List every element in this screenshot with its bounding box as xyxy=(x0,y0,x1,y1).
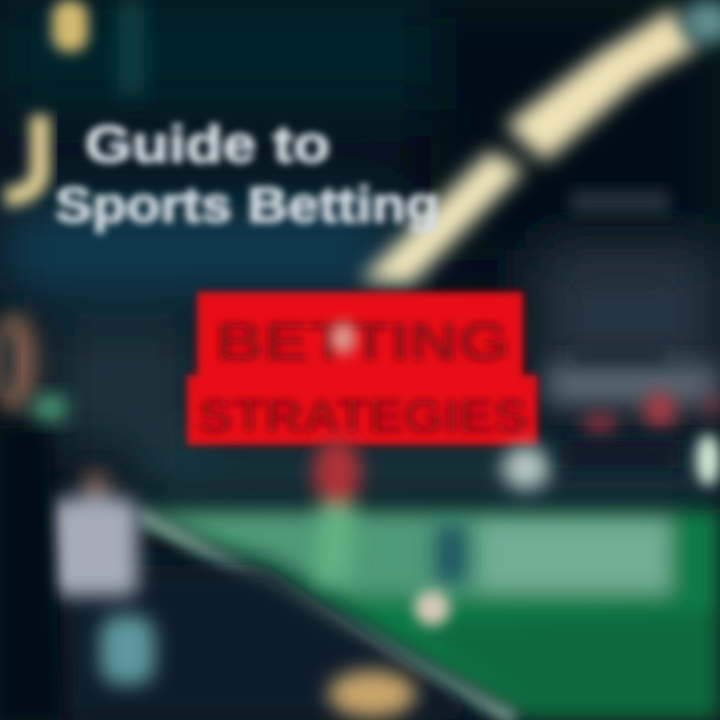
dark band right xyxy=(560,440,680,468)
top floodlight blob xyxy=(52,0,88,52)
title: Sports Betting xyxy=(55,177,440,233)
title: Guide to xyxy=(85,116,330,174)
player: white shirt xyxy=(436,446,550,583)
light beam xyxy=(360,8,698,285)
crowd band right xyxy=(545,365,720,405)
crowd red spots xyxy=(584,392,720,437)
cream glow bottom xyxy=(328,670,416,718)
icon: ball xyxy=(414,590,450,626)
right side faint text xyxy=(570,190,670,363)
banner text: BETTING xyxy=(215,312,510,372)
spectator: dark foreground figure xyxy=(0,312,68,720)
right edge light xyxy=(696,434,720,486)
left floor xyxy=(60,565,490,720)
icon: cream hook xyxy=(5,115,40,197)
banner text: STRATEGIES xyxy=(198,390,528,442)
panel: red banner xyxy=(187,292,537,445)
spectator: white figure xyxy=(50,471,155,685)
corner glow top right xyxy=(682,0,720,44)
banner text xyxy=(198,312,528,442)
pitch line xyxy=(140,515,515,720)
pitch xyxy=(140,510,720,720)
title xyxy=(55,116,440,233)
teal pillar at top xyxy=(118,0,144,95)
icon: white spot in banner xyxy=(330,322,356,354)
player: red shirt xyxy=(313,438,361,585)
